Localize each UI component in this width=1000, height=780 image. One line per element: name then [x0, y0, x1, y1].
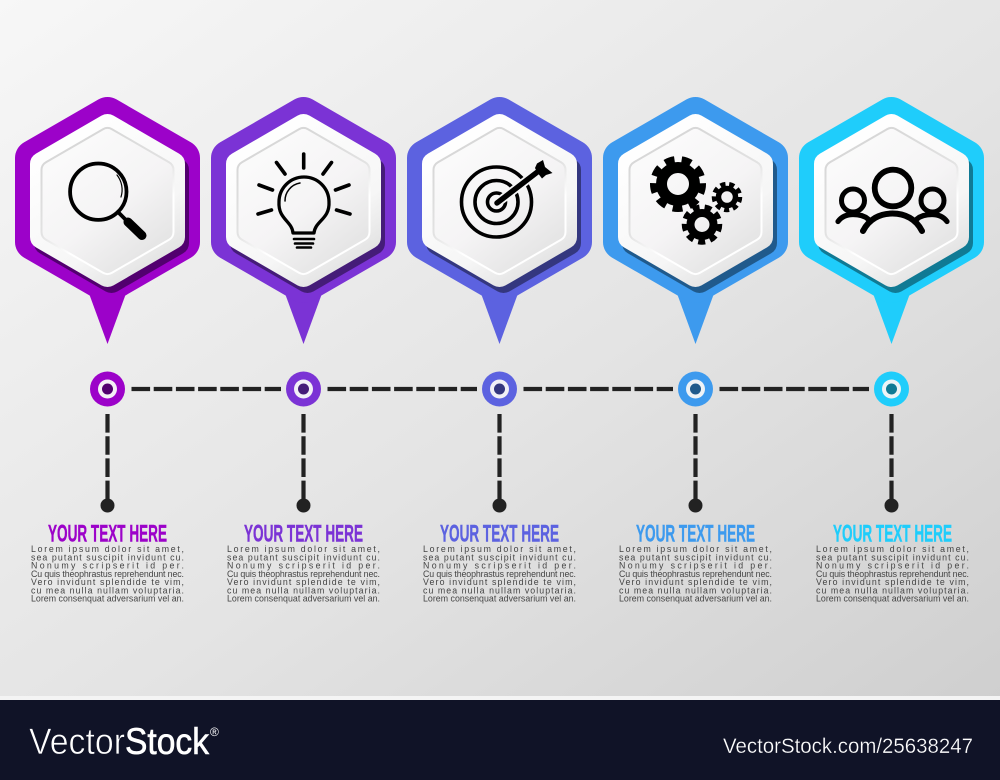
text block 1: Lorem ipsum dolor sit amet, [31, 544, 184, 554]
panel: step 2 idea [227, 115, 380, 604]
hexagon pin 1 [33, 115, 182, 344]
text block 5: Vero invidunt splendide te vim, [816, 577, 969, 587]
text block 3: Lorem ipsum dolor sit amet, [423, 544, 576, 554]
timeline node 3 [482, 372, 517, 406]
text block 3 [423, 544, 576, 604]
vertical connector 5 [884, 414, 898, 512]
heading 3: YOUR TEXT HERE [440, 520, 559, 548]
text block 2 [227, 544, 380, 604]
text block 5: Lorem consenquat adversarium vel an. [816, 594, 969, 604]
horizontal dashed timeline [132, 387, 869, 391]
icon: gears [654, 160, 740, 242]
text block 4: Vero invidunt splendide te vim, [619, 577, 772, 587]
text block 3: Lorem consenquat adversarium vel an. [423, 594, 576, 604]
panel: step 4 gears [619, 115, 772, 604]
footer bar [0, 696, 1000, 780]
text block 4: Lorem consenquat adversarium vel an. [619, 594, 772, 604]
footer logo [29, 721, 219, 762]
panel: step 3 target [423, 115, 576, 604]
text block 2: Nonumy scripserit id per. [227, 561, 380, 571]
heading 4: YOUR TEXT HERE [636, 520, 755, 548]
text block 2: Lorem consenquat adversarium vel an. [227, 594, 380, 604]
text block 5: Cu quis theophrastus reprehendunt nec. [816, 569, 969, 579]
text block 1: Lorem consenquat adversarium vel an. [31, 594, 184, 604]
timeline node 5 [874, 372, 909, 406]
text block 2: Lorem ipsum dolor sit amet, [227, 544, 380, 554]
text block 5 [816, 544, 969, 604]
icon: light bulb [258, 154, 350, 248]
text block 1: Nonumy scripserit id per. [31, 561, 184, 571]
hexagon pin 3 [425, 115, 574, 344]
heading 1: YOUR TEXT HERE [48, 520, 167, 548]
text block 4: Cu quis theophrastus reprehendunt nec. [619, 569, 772, 579]
icon: target with arrow [462, 160, 552, 237]
text block 5: cu mea nulla nullam voluptaria. [816, 585, 969, 595]
vertical connector 2 [296, 414, 310, 512]
text block 3: cu mea nulla nullam voluptaria. [423, 585, 576, 595]
panel: step 1 research [31, 115, 184, 604]
text block 2: sea putant suscipit invidunt cu. [227, 552, 380, 562]
text block 2: Cu quis theophrastus reprehendunt nec. [227, 569, 380, 579]
text block 3: Vero invidunt splendide te vim, [423, 577, 576, 587]
text block 2: Vero invidunt splendide te vim, [227, 577, 380, 587]
text block 4: Nonumy scripserit id per. [619, 561, 772, 571]
timeline node 2 [286, 372, 321, 406]
footer image id: VectorStock.com/25638247 [723, 735, 973, 758]
text block 1: cu mea nulla nullam voluptaria. [31, 585, 184, 595]
icon: team of people [838, 170, 947, 231]
timeline node 1 [90, 372, 125, 406]
text block 3: sea putant suscipit invidunt cu. [423, 552, 576, 562]
text block 4 [619, 544, 772, 604]
text block 5: sea putant suscipit invidunt cu. [816, 552, 969, 562]
hexagon pin 4 [621, 115, 770, 344]
panel: step 5 team [816, 115, 969, 604]
text block 4: cu mea nulla nullam voluptaria. [619, 585, 772, 595]
text block 2: cu mea nulla nullam voluptaria. [227, 585, 380, 595]
vertical connector 4 [688, 414, 702, 512]
text block 1: sea putant suscipit invidunt cu. [31, 552, 184, 562]
text block 4: Lorem ipsum dolor sit amet, [619, 544, 772, 554]
text block 5: Nonumy scripserit id per. [816, 561, 969, 571]
text block 3: Nonumy scripserit id per. [423, 561, 576, 571]
footer logo: ® [210, 725, 219, 739]
text block 4: sea putant suscipit invidunt cu. [619, 552, 772, 562]
vertical connector 1 [100, 414, 114, 512]
heading 2: YOUR TEXT HERE [244, 520, 363, 548]
text block 3: Cu quis theophrastus reprehendunt nec. [423, 569, 576, 579]
hexagon pin 5 [817, 115, 966, 344]
footer logo: Vector [29, 721, 125, 762]
footer logo: Stock [125, 721, 209, 762]
text block 1: Cu quis theophrastus reprehendunt nec. [31, 569, 184, 579]
hexagon pin 2 [229, 115, 378, 344]
text block 5: Lorem ipsum dolor sit amet, [816, 544, 969, 554]
text block 1: Vero invidunt splendide te vim, [31, 577, 184, 587]
vertical connector 3 [492, 414, 506, 512]
timeline node 4 [678, 372, 713, 406]
text block 1 [31, 544, 184, 604]
icon: magnifying glass [70, 164, 142, 236]
